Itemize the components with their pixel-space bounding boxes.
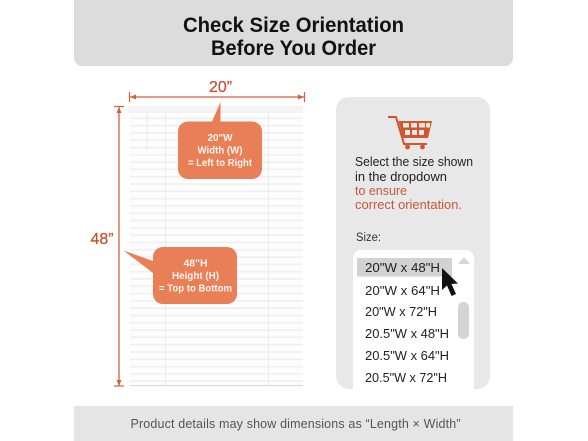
- scroll arrow: [458, 257, 470, 264]
- footer note: Product details may show dimensions as “Length × Width”: [130, 417, 460, 431]
- instruction text: correct orientation.: [355, 198, 462, 212]
- size options: 20.5"W x 48"H: [365, 326, 449, 341]
- callout: width: Width (W): [198, 144, 242, 156]
- dropdown list: [353, 250, 474, 389]
- blinds product image: [128, 106, 303, 386]
- callout: width: [178, 102, 262, 179]
- width dimension arrow: [130, 92, 304, 102]
- callout: width: 20"W: [208, 132, 233, 144]
- size options: 20"W x 72"H: [365, 304, 437, 319]
- panel: size selection: [336, 97, 490, 389]
- title: Before You Order: [211, 37, 376, 60]
- callout: width: = Left to Right: [188, 157, 252, 169]
- height label: 48”: [90, 231, 114, 248]
- callout: height: 48"H: [184, 258, 208, 270]
- instruction text: [355, 155, 473, 212]
- size label: Size:: [356, 232, 381, 244]
- title: Check Size Orientation: [183, 14, 404, 37]
- size options: 20"W x 48"H: [365, 260, 440, 275]
- callout: height: [124, 247, 237, 304]
- size options: 20.5"W x 64"H: [365, 348, 449, 363]
- size options: 20.5"W x 72"H: [365, 370, 447, 385]
- instruction text: to ensure: [355, 184, 407, 198]
- callout: height: Height (H): [172, 270, 219, 282]
- icon: cursor arrow: [442, 268, 458, 296]
- size options: 20"W x 64"H: [365, 283, 440, 298]
- scrollbar thumb: [458, 302, 469, 339]
- instruction text: in the dropdown: [355, 170, 447, 184]
- instruction text: Select the size shown: [355, 155, 473, 169]
- selected row highlight: [357, 258, 452, 276]
- size options: [365, 260, 449, 385]
- width label: 20”: [209, 79, 232, 96]
- height dimension arrow: [114, 106, 124, 386]
- callout: height: = Top to Bottom: [159, 282, 232, 294]
- footer note: [74, 406, 513, 441]
- title: [183, 14, 404, 60]
- header banner: [74, 0, 513, 66]
- icon: shopping cart: [388, 117, 432, 149]
